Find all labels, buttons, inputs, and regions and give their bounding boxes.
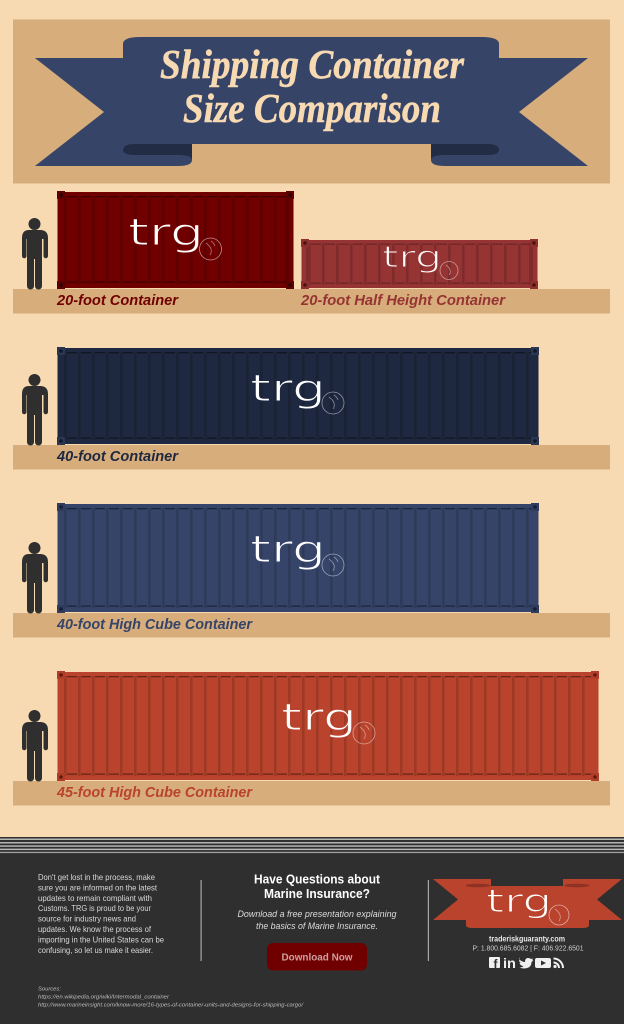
sources: Sources:	[38, 986, 61, 992]
logo: trg on 40-foot high cube	[250, 528, 344, 576]
call to action heading: Marine Insurance?	[264, 887, 370, 901]
label: 45-foot High Cube Container: 45-foot High Cube Container	[56, 785, 253, 801]
logo: trg on 45-foot: trg	[281, 696, 357, 739]
container: 20-foot half height	[301, 239, 538, 289]
title ribbon	[35, 37, 588, 166]
logo: trg on 40-foot high cube: trg	[250, 528, 326, 571]
person 3	[22, 542, 48, 614]
ground bar 4	[13, 781, 610, 806]
button: Download Now: Download Now	[282, 952, 353, 964]
call to action heading: Have Questions about	[254, 872, 381, 886]
logo: trg on 40-foot	[250, 367, 344, 414]
header panel	[13, 20, 610, 184]
footer body text: Customs. TRG is proud to be your	[38, 903, 151, 913]
container: 40-foot	[57, 347, 539, 445]
container: 20-foot	[57, 191, 294, 289]
footer ribbon logo	[433, 879, 622, 928]
logo: trg on half height: trg	[382, 240, 442, 274]
social icons	[489, 955, 563, 971]
logo: trg on 40-foot: trg	[250, 367, 326, 410]
footer body text: sure you are informed on the latest	[38, 882, 158, 892]
ground bar 2	[13, 445, 610, 470]
footer body text: updates. We know the process of	[38, 924, 152, 934]
logo: trg on half height	[382, 240, 458, 280]
ground bar 1	[13, 289, 610, 314]
person 4	[22, 710, 48, 782]
footer body text: confusing, so let us make it easier.	[38, 945, 153, 955]
label: 40-foot High Cube Container: 40-foot High Cube Container	[56, 617, 253, 633]
label: 20-foot Half Height Container: 20-foot Half Height Container	[300, 293, 506, 309]
logo: trg on 45-foot	[281, 696, 375, 744]
person 1	[22, 218, 48, 290]
logo: trg on 20-foot: trg	[128, 211, 204, 254]
website: traderiskguaranty.com	[489, 934, 565, 944]
phone and fax: P: 1.800.685.6082 | F: 406.922.6501	[472, 946, 584, 952]
title: Shipping Container	[160, 41, 465, 87]
sources: https://en.wikipedia.org/wiki/Intermodal_container	[38, 994, 170, 1000]
footer panel	[0, 837, 624, 1024]
call to action description: Download a free presentation explaining	[238, 909, 396, 919]
footer body text: importing in the United States can be	[38, 934, 164, 944]
footer body text: source for industry news and	[38, 914, 136, 924]
title: Size Comparison	[183, 85, 441, 131]
label: 20-foot Container: 20-foot Container	[56, 293, 179, 309]
ground bar 3	[13, 613, 610, 638]
person 2	[22, 374, 48, 446]
logo: trg on 20-foot	[128, 211, 222, 260]
call to action description: the basics of Marine Insurance.	[256, 921, 378, 931]
social icons: f	[494, 957, 498, 971]
label: 40-foot Container: 40-foot Container	[56, 449, 179, 465]
footer body text: Don't get lost in the process, make	[38, 872, 155, 882]
footer body text: updates to remain compliant with	[38, 893, 152, 903]
social icons: in	[503, 955, 516, 971]
container: 45-foot high cube	[57, 671, 599, 781]
sources: http://www.marineinsight.com/know-more/16-types-of-container-units-and-designs-for-shipping-cargo/	[38, 1002, 304, 1008]
button: Download Now	[267, 943, 367, 970]
footer ribbon logo: trg	[486, 882, 552, 920]
container: 40-foot high cube	[57, 503, 539, 613]
